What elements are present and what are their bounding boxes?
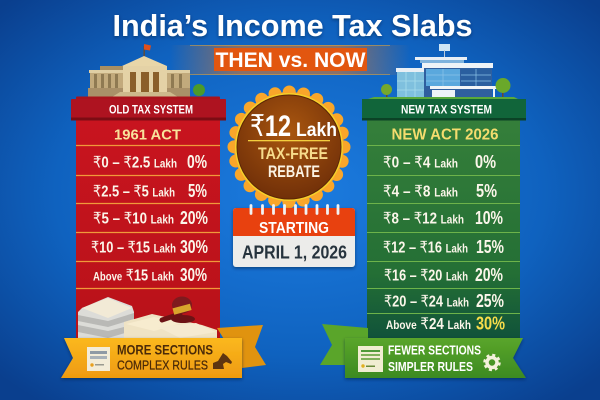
row: ₹0 – ₹4 Lakh <box>383 154 458 172</box>
row <box>384 291 504 311</box>
row: 5% <box>476 181 497 201</box>
row: Above ₹15 Lakh <box>93 268 174 284</box>
row: 25% <box>476 291 504 311</box>
badge: 12 lakh tax-free rebate <box>234 92 344 202</box>
badge: 12 lakh tax-free rebate: ₹12 <box>250 110 291 143</box>
row: 20% <box>475 265 503 285</box>
row <box>93 152 207 172</box>
row: 20% <box>180 208 208 228</box>
row: Above ₹24 Lakh <box>386 316 471 333</box>
icon: new office building <box>396 44 497 98</box>
badge: 12 lakh tax-free rebate: TAX-FREE <box>258 144 328 163</box>
row: 0% <box>187 152 207 172</box>
row <box>386 314 505 334</box>
row: ₹20 – ₹24 Lakh <box>384 294 469 310</box>
row: 5% <box>188 181 207 201</box>
row: ₹4 – ₹8 Lakh <box>383 184 458 200</box>
row: 30% <box>180 265 207 285</box>
ribbon: fewer sections: SIMPLER RULES <box>388 359 473 374</box>
icon: document <box>87 347 110 371</box>
panel body <box>76 119 220 344</box>
act label: 1961 ACT <box>114 126 181 144</box>
row: 10% <box>475 208 503 228</box>
badge: 12 lakh tax-free rebate: REBATE <box>268 162 320 181</box>
row: 15% <box>476 237 504 257</box>
panel header <box>362 99 526 120</box>
row: ₹12 – ₹16 Lakh <box>383 240 468 256</box>
badge: 12 lakh tax-free rebate: Lakh <box>296 120 337 141</box>
panel header <box>71 99 226 120</box>
icon: old building tree <box>193 84 205 96</box>
icon: gavel <box>213 353 232 369</box>
panel: old tax system <box>71 96 226 344</box>
panel: new tax system <box>362 97 526 340</box>
icon: old government building <box>88 44 190 97</box>
row <box>93 181 207 201</box>
row <box>383 208 503 228</box>
calendar: starting april 1, 2026: APRIL 1, 2026 <box>242 242 347 262</box>
row <box>93 265 207 285</box>
row: ₹8 – ₹12 Lakh <box>383 210 464 228</box>
ribbon: more sections: MORE SECTIONS <box>117 342 213 358</box>
icon: paper stacks and gavel <box>78 296 217 342</box>
row <box>384 265 503 285</box>
row: 30% <box>180 237 208 257</box>
icon: left tree <box>381 84 392 99</box>
icon: gear <box>484 355 500 370</box>
panel header: NEW TAX SYSTEM <box>401 102 492 116</box>
row <box>93 208 208 228</box>
row: 30% <box>476 314 505 334</box>
subtitle banner: THEN vs. NOW <box>216 49 366 72</box>
panel header: OLD TAX SYSTEM <box>109 102 193 116</box>
calendar: starting april 1, 2026: STARTING <box>259 220 329 237</box>
panel body <box>367 118 520 340</box>
ribbon: more sections: COMPLEX RULES <box>117 358 208 372</box>
row: ₹10 – ₹15 Lakh <box>91 240 176 256</box>
ribbon: more sections <box>61 325 266 378</box>
row <box>383 152 496 172</box>
row: ₹0 – ₹2.5 Lakh <box>93 154 177 172</box>
row: ₹2.5 – ₹5 Lakh <box>93 184 175 200</box>
row <box>91 237 208 257</box>
calendar: starting april 1, 2026 <box>233 206 355 267</box>
row: ₹5 – ₹10 Lakh <box>93 210 174 228</box>
row: 0% <box>475 152 496 172</box>
icon: document <box>358 346 383 372</box>
title: India’s Income Tax Slabs <box>112 8 472 43</box>
icon: right tree <box>496 78 510 99</box>
subtitle banner <box>170 45 410 75</box>
row: ₹16 – ₹20 Lakh <box>384 268 468 284</box>
row <box>383 237 504 257</box>
ribbon: fewer sections <box>320 324 526 378</box>
ribbon: fewer sections: FEWER SECTIONS <box>388 342 481 358</box>
act label: NEW ACT 2026 <box>392 126 499 144</box>
row <box>383 181 497 201</box>
